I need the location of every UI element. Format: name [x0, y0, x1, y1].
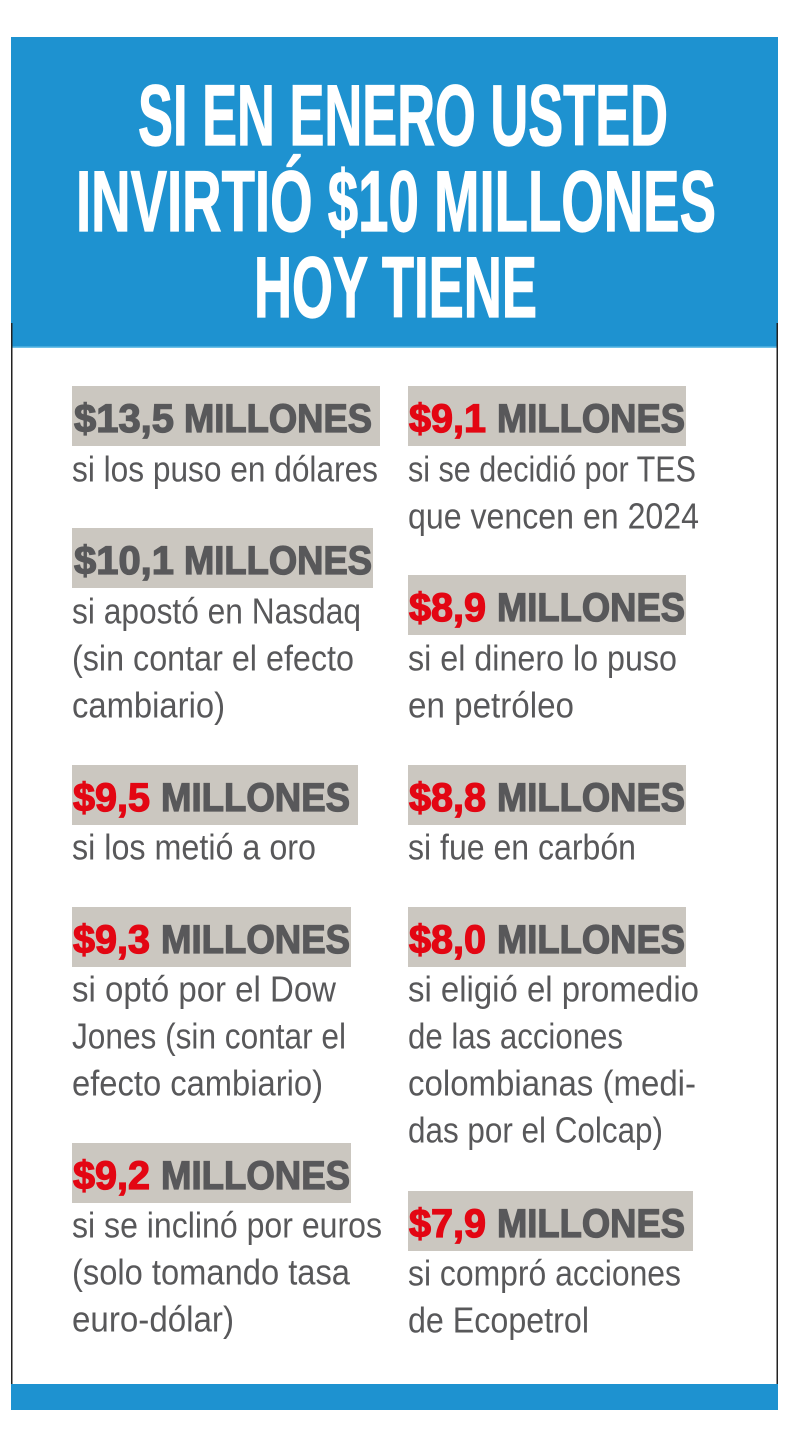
- item: $13,5 millones: [72, 386, 380, 490]
- item: $9,1 millones: $9,1: [409, 397, 486, 441]
- item: $9,5 millones: $9,5: [73, 776, 150, 820]
- item: $13,5 millones: $13,5: [74, 397, 174, 441]
- item: $9,1 millones: [408, 386, 699, 536]
- item: $8,8 millones: $8,8: [409, 776, 486, 820]
- item: $9,5 millones: [72, 765, 358, 868]
- item: $9,1 millones: que vencen en 2024: [408, 496, 699, 536]
- item: $9,3 millones: MILLONES: [161, 918, 350, 962]
- item: $13,5 millones: MILLONES: [184, 397, 372, 441]
- item: $10,1 millones: MILLONES: [184, 539, 372, 583]
- item: $8,9 millones: MILLONES: [497, 586, 685, 630]
- item: $9,3 millones: Jones (sin contar el: [72, 1016, 346, 1056]
- item: $7,9 millones: MILLONES: [497, 1202, 685, 1246]
- item: $9,5 millones: MILLONES: [161, 776, 350, 820]
- item: $9,1 millones: si se decidió por TES: [408, 448, 696, 490]
- item: $8,0 millones: $8,0: [409, 918, 486, 962]
- item: $10,1 millones: (sin contar el efecto: [72, 638, 354, 678]
- item: $9,3 millones: efecto cambiario): [72, 1062, 323, 1104]
- item: $9,3 millones: si optó por el Dow: [72, 968, 337, 1010]
- item: $8,0 millones: colombianas (medi-: [408, 1062, 696, 1104]
- item: $8,0 millones: MILLONES: [497, 918, 685, 962]
- left column: [72, 386, 382, 1340]
- item: $7,9 millones: si compró acciones: [408, 1252, 681, 1294]
- item: $8,8 millones: si fue en carbón: [408, 826, 636, 868]
- item: $9,2 millones: $9,2: [73, 1154, 150, 1198]
- item: $9,1 millones: MILLONES: [497, 397, 685, 441]
- item: $9,5 millones: si los metió a oro: [72, 826, 316, 868]
- item: $8,8 millones: MILLONES: [497, 776, 685, 820]
- item: $9,2 millones: MILLONES: [161, 1154, 350, 1198]
- item: $7,9 millones: $7,9: [409, 1202, 486, 1246]
- footer bar: [11, 1384, 778, 1410]
- item: $10,1 millones: $10,1: [74, 539, 174, 583]
- item: $9,2 millones: si se inclinó por euros: [72, 1204, 382, 1246]
- item: $9,2 millones: [72, 1143, 382, 1340]
- item: $8,9 millones: $8,9: [409, 586, 486, 630]
- item: $8,0 millones: das por el Colcap): [408, 1110, 663, 1150]
- item: $7,9 millones: de Ecopetrol: [408, 1300, 589, 1340]
- item: $10,1 millones: [72, 528, 373, 726]
- item: $9,2 millones: euro-dólar): [72, 1298, 234, 1340]
- item: $9,3 millones: [72, 907, 351, 1104]
- title: HOY TIENE: [254, 240, 537, 336]
- item: $9,3 millones: $9,3: [73, 918, 150, 962]
- item: $8,9 millones: si el dinero lo puso: [408, 638, 677, 678]
- item: $9,2 millones: (solo tomando tasa: [72, 1252, 351, 1292]
- item: $8,0 millones: [408, 907, 699, 1150]
- title: [76, 68, 716, 336]
- item: $8,9 millones: en petróleo: [408, 684, 574, 726]
- item: $10,1 millones: cambiario): [72, 684, 225, 726]
- item: $8,9 millones: [408, 575, 686, 726]
- item: $8,8 millones: [408, 765, 686, 868]
- right column: [408, 386, 699, 1340]
- item: $10,1 millones: si apostó en Nasdaq: [72, 590, 361, 632]
- header panel: [11, 37, 778, 348]
- item: $13,5 millones: si los puso en dólares: [72, 448, 378, 490]
- item: $7,9 millones: [408, 1191, 693, 1340]
- item: $8,0 millones: de las acciones: [408, 1016, 623, 1056]
- item: $8,0 millones: si eligió el promedio: [408, 968, 699, 1010]
